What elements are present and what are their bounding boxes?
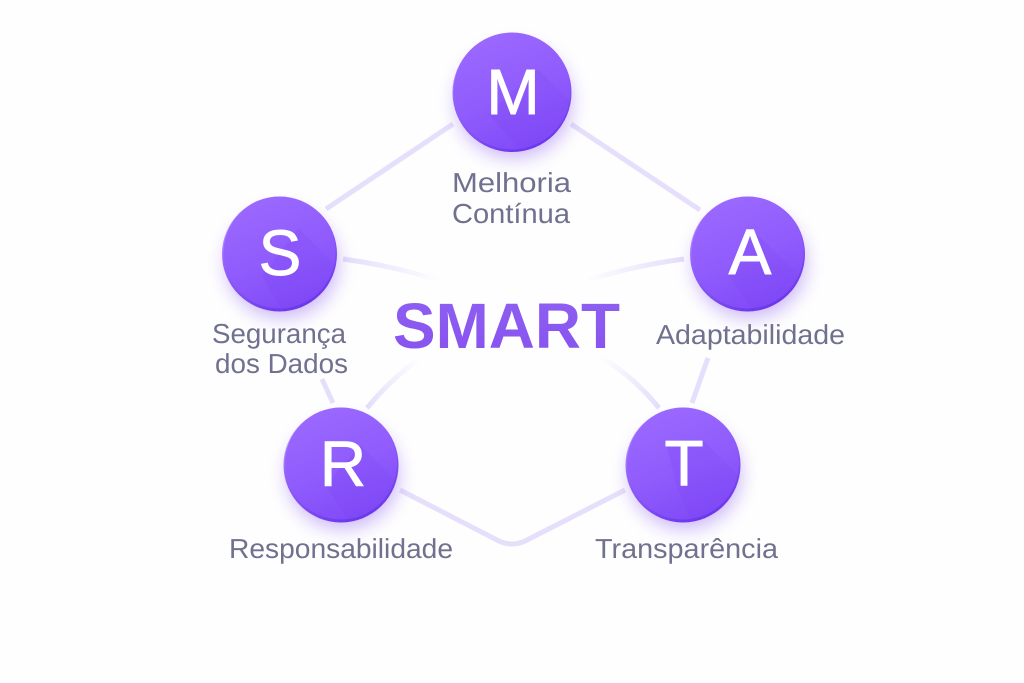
label: Melhoria Contínua: Melhoria	[452, 167, 572, 198]
connector lines	[322, 124, 708, 544]
node R: R	[320, 428, 366, 500]
label: Segurança dos Dados	[212, 318, 348, 379]
label: Adaptabilidade: Adaptabilidade	[656, 319, 845, 350]
node T: T	[664, 427, 704, 499]
node R	[278, 408, 408, 538]
label: Transparência: Transparência	[595, 533, 779, 564]
title: SMART: SMART	[393, 290, 620, 362]
node T	[620, 408, 750, 538]
label: Segurança dos Dados: Segurança	[212, 318, 347, 349]
diagram: SMART pentagon	[213, 32, 844, 564]
node A	[684, 196, 816, 328]
node S	[216, 196, 348, 328]
label: Melhoria Contínua: Contínua	[452, 198, 571, 229]
node M	[452, 32, 590, 171]
label: Melhoria Contínua	[452, 167, 572, 229]
node M: M	[486, 56, 540, 128]
label: Segurança dos Dados: dos Dados	[215, 348, 348, 379]
node S: S	[259, 217, 301, 289]
label: Responsabilidade: Responsabilidade	[229, 533, 453, 564]
node A: A	[729, 216, 772, 288]
